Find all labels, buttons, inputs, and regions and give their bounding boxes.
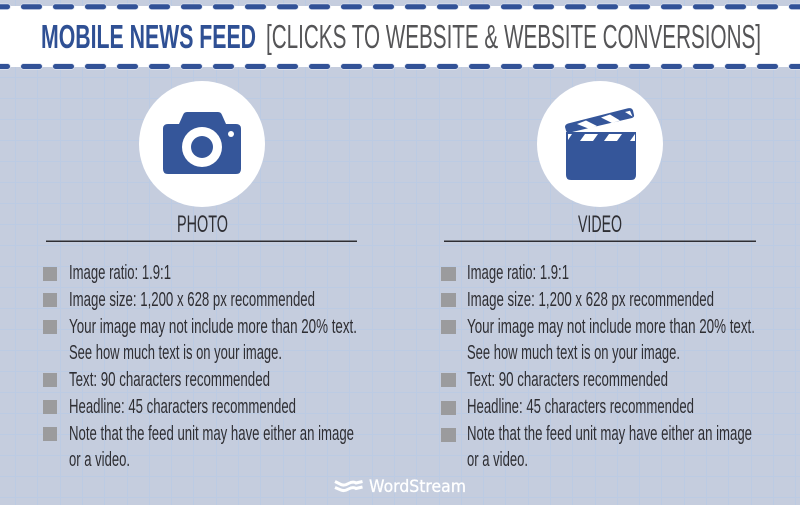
header band [0, 6, 800, 67]
heading: photo: PHOTO [177, 211, 228, 238]
video specifications list: or a video. [467, 449, 528, 471]
heading rule [444, 240, 756, 242]
panel: video [441, 81, 756, 471]
photo specifications list: Headline: 45 characters recommended [69, 396, 296, 418]
title: MOBILE NEWS FEED [41, 18, 256, 55]
heading: video: VIDEO [578, 211, 622, 238]
photo specifications list: Image size: 1,200 x 628 px recommended [69, 289, 315, 311]
photo specifications list: Text: 90 characters recommended [69, 369, 270, 391]
panel: photo [43, 81, 357, 471]
icon: camera [139, 81, 265, 207]
video specifications list [467, 262, 755, 471]
video specifications list: See how much text is on your image. [467, 342, 680, 364]
title [41, 18, 761, 55]
bullet squares [441, 267, 456, 442]
video specifications list: Image ratio: 1.9:1 [467, 262, 569, 284]
icon: clapperboard [537, 81, 663, 207]
photo specifications list: See how much text is on your image. [69, 342, 282, 364]
bullet squares [43, 267, 57, 441]
video specifications list: Text: 90 characters recommended [467, 369, 668, 391]
heading rule [46, 240, 357, 242]
photo specifications list: Note that the feed unit may have either an image [69, 423, 354, 445]
photo specifications list: Your image may not include more than 20% text. [69, 316, 357, 338]
WordStream logo: WordStream [369, 477, 466, 496]
photo specifications list: or a video. [69, 449, 130, 471]
photo specifications list: Image ratio: 1.9:1 [69, 262, 171, 284]
photo specifications list [69, 262, 357, 471]
